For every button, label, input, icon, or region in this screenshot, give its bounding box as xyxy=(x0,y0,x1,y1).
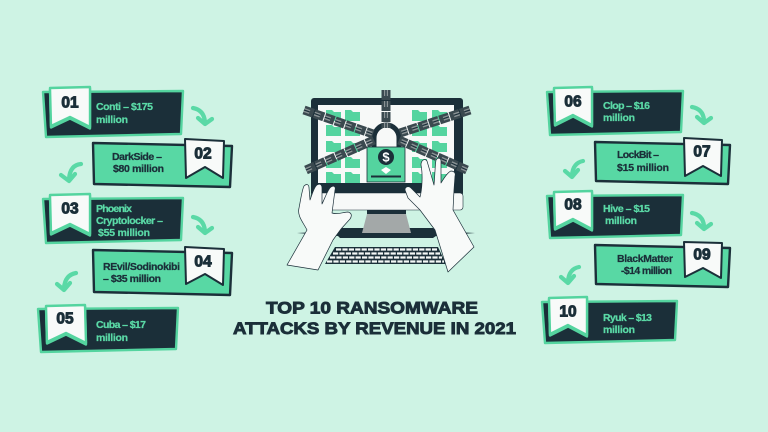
left hand xyxy=(287,184,351,270)
item 08: Hive: million xyxy=(605,215,637,227)
item 07: LockBit: LockBit – xyxy=(617,149,659,161)
item 09: BlackMatter xyxy=(595,242,730,287)
padlock body: $ xyxy=(382,150,390,164)
item 05: Cuba xyxy=(38,305,178,352)
monitor stand xyxy=(297,208,475,238)
illustration: locked computer with chains and hands xyxy=(287,90,475,272)
padlock shackle xyxy=(374,125,399,150)
item 09: BlackMatter: -$14 million xyxy=(621,265,672,277)
item 02: DarkSide xyxy=(93,139,232,187)
item 07: LockBit: $15 million xyxy=(617,162,669,174)
item 04: REvil/Sodinokibi: REvil/Sodinokibi xyxy=(103,261,180,273)
arrow 09 to 10 xyxy=(561,267,579,283)
right hand xyxy=(405,158,474,272)
item 08: Hive xyxy=(547,191,683,238)
padlock body xyxy=(367,147,405,182)
item 06: Clop: million xyxy=(603,112,635,124)
title: TOP 10 RANSOMWARE xyxy=(266,298,478,318)
arrow 03 to 04 xyxy=(193,217,212,233)
item 10: Ryuk xyxy=(542,297,677,343)
item 07: LockBit: 07 xyxy=(693,144,711,160)
title: ATTACKS BY REVENUE IN 2021 xyxy=(233,319,516,338)
item 09: BlackMatter: BlackMatter xyxy=(617,253,673,265)
item 10: Ryuk: Ryuk – $13 xyxy=(603,312,652,324)
chains xyxy=(304,90,470,170)
arrow 06 to 07 xyxy=(692,107,711,123)
item 03: Phoenix Cryptolocker: Cryptolocker – xyxy=(96,215,163,227)
item 02: DarkSide: DarkSide – xyxy=(112,151,162,163)
item 08: Hive: Hive – $15 xyxy=(603,203,650,215)
item 05: Cuba: Cuba – $17 xyxy=(96,319,146,331)
item 06: Clop: Clop – $16 xyxy=(603,100,650,112)
item 02: DarkSide: 02 xyxy=(194,146,212,162)
item 04: REvil/Sodinokibi: – $35 million xyxy=(103,273,161,285)
arrow 07 to 08 xyxy=(565,161,583,177)
item 03: Phoenix Cryptolocker: $55 million xyxy=(98,227,150,239)
item 02: DarkSide: $80 million xyxy=(113,163,164,175)
item 03: Phoenix Cryptolocker xyxy=(43,194,183,243)
item 07: LockBit xyxy=(595,138,730,184)
item 06: Clop: 06 xyxy=(564,94,582,110)
item 05: Cuba: 05 xyxy=(56,310,74,328)
item 05: Cuba: million xyxy=(96,332,128,344)
item 04: REvil/Sodinokibi xyxy=(93,247,232,295)
item 03: Phoenix Cryptolocker: 03 xyxy=(61,200,79,218)
arrow 08 to 09 xyxy=(692,213,711,229)
item 01: Conti: 01 xyxy=(61,94,79,112)
item 04: REvil/Sodinokibi: 04 xyxy=(194,254,212,270)
item 09: BlackMatter: 09 xyxy=(693,246,711,264)
folders xyxy=(326,110,447,183)
keyboard xyxy=(325,247,446,264)
item 01: Conti xyxy=(43,87,183,137)
item 01: Conti: Conti – $175 xyxy=(96,101,153,113)
item 03: Phoenix Cryptolocker: Phoenix xyxy=(96,203,132,215)
item 06: Clop xyxy=(547,87,683,135)
title xyxy=(233,298,516,338)
arrow 01 to 02 xyxy=(193,108,212,124)
monitor xyxy=(311,98,463,210)
item 10: Ryuk: 10 xyxy=(559,304,577,320)
arrow 04 to 05 xyxy=(57,273,76,290)
item 10: Ryuk: million xyxy=(603,324,635,336)
arrow 02 to 03 xyxy=(61,164,81,181)
item 08: Hive: 08 xyxy=(564,196,582,214)
item 01: Conti: million xyxy=(96,114,128,126)
